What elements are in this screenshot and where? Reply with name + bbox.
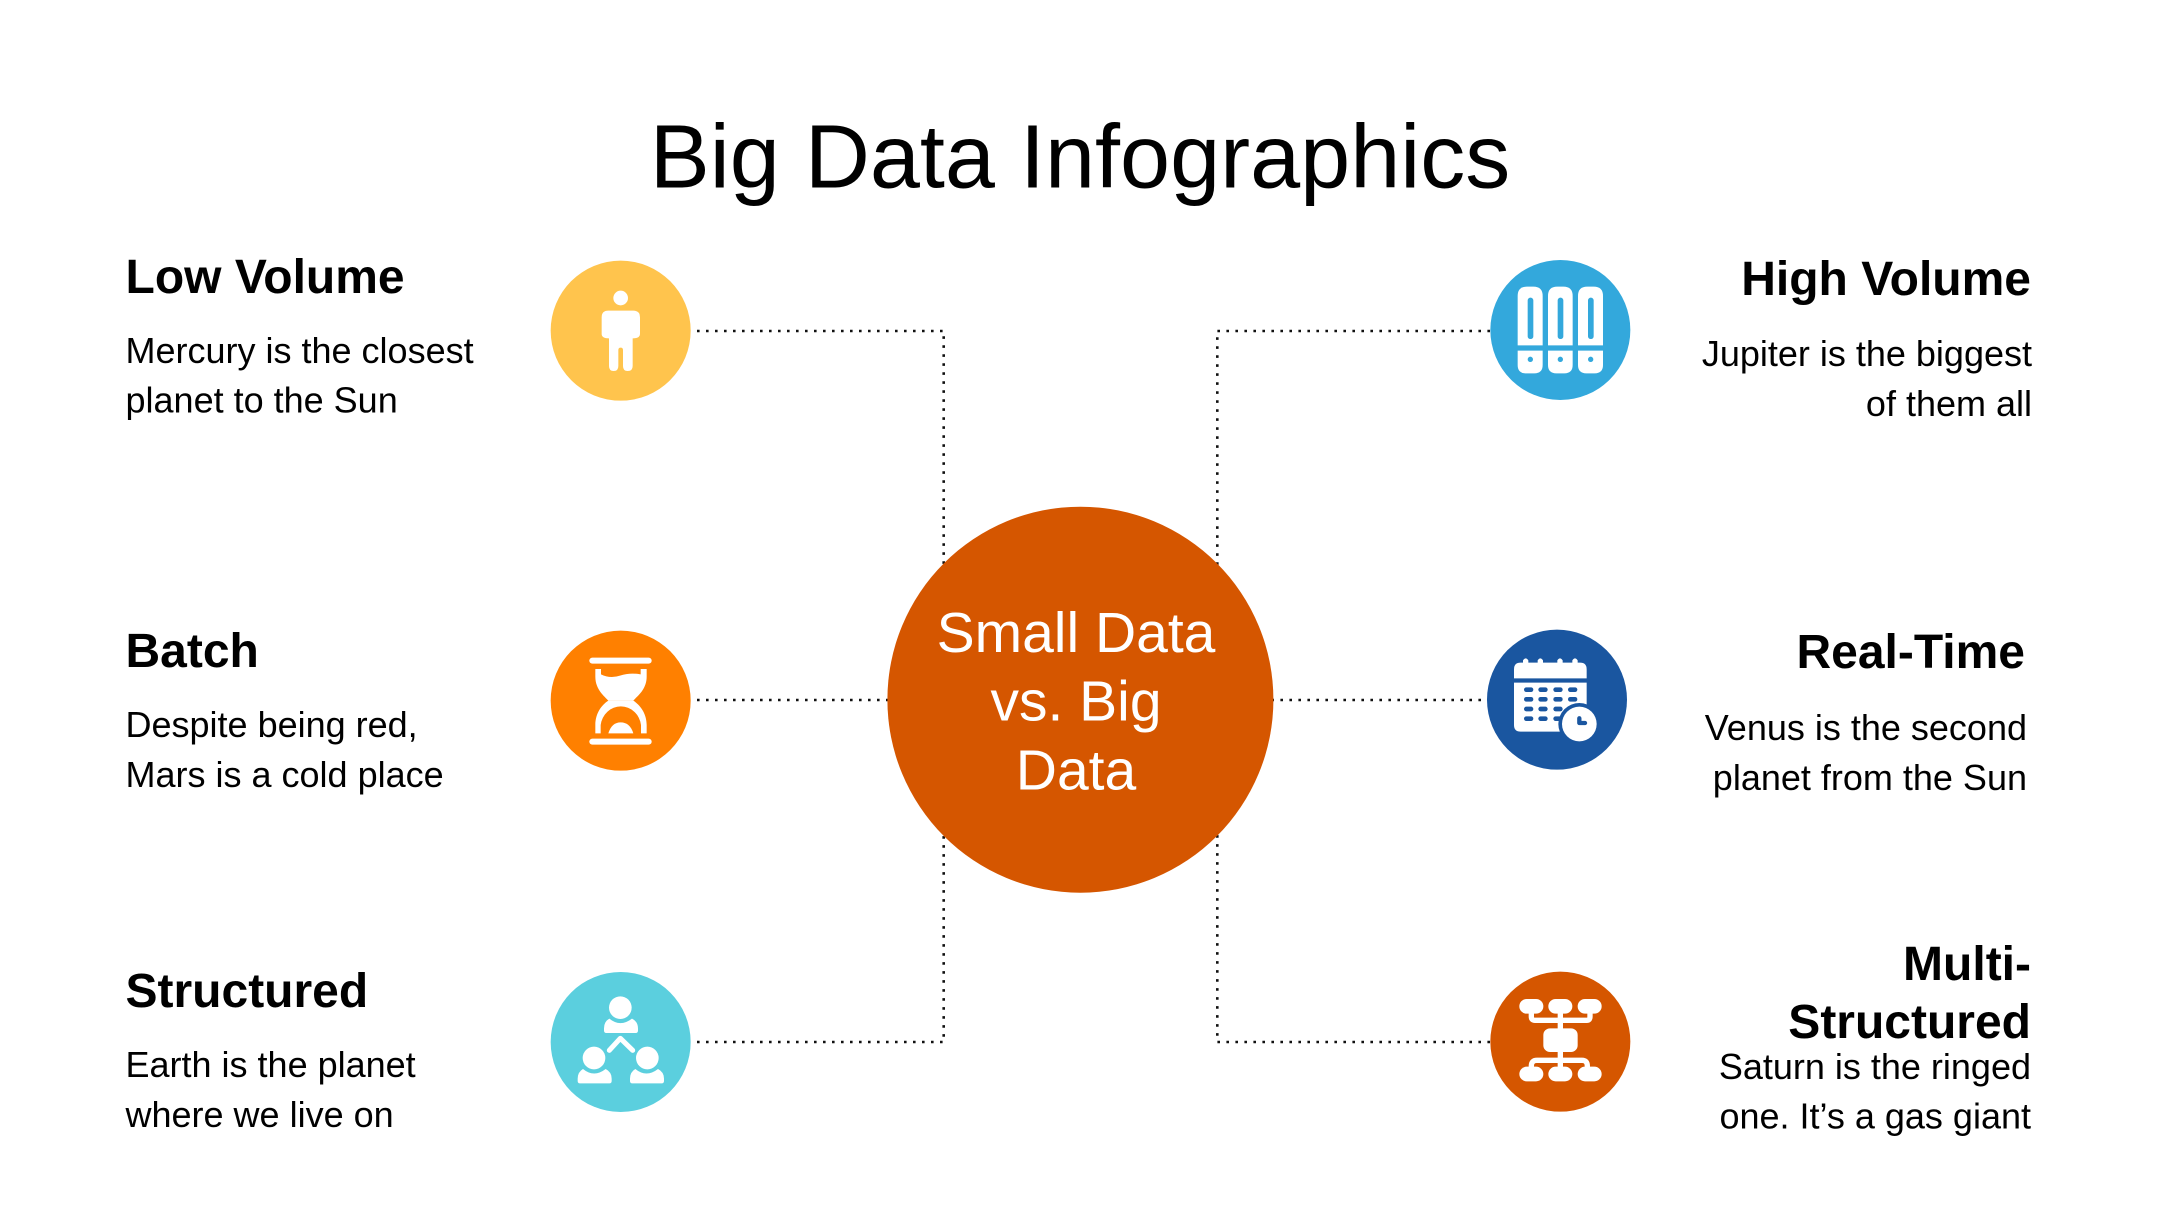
panel: high volume text: of them all <box>1866 383 2032 424</box>
panel: structured text <box>124 965 416 1135</box>
panel: high volume text: Jupiter is the biggest <box>1702 333 2032 374</box>
icon: binders on blue circle <box>1490 260 1630 400</box>
panel: batch text <box>126 625 444 795</box>
panel: real-time text: Real-Time <box>1796 626 2025 679</box>
panel: real-time text: planet from the Sun <box>1713 757 2027 798</box>
panel: multi-structured text <box>1719 938 2031 1136</box>
panel: real-time text <box>1705 626 2027 798</box>
panel: low volume text <box>126 251 474 420</box>
icon: network tree on burnt orange circle <box>1490 972 1630 1112</box>
panel: multi-structured text: Structured <box>1788 996 2031 1049</box>
panel: batch text: Despite being red, <box>126 704 418 745</box>
panel: structured text: Structured <box>126 965 368 1018</box>
title: Big Data Infographics <box>650 108 1510 208</box>
panel: structured text: Earth is the planet <box>126 1044 416 1085</box>
panel: low volume text: planet to the Sun <box>126 380 398 420</box>
panel: batch text: Batch <box>126 625 259 678</box>
central circle: small data vs big data <box>887 507 1273 893</box>
icon: team hierarchy on teal circle <box>551 972 691 1112</box>
panel: structured text: where we live on <box>124 1094 394 1135</box>
panel: high volume text <box>1702 253 2032 424</box>
central circle: small data vs big data: Data <box>1016 738 1136 802</box>
panel: multi-structured text: Saturn is the ringed <box>1719 1046 2031 1087</box>
icon: calendar with clock on navy circle <box>1487 630 1627 770</box>
panel: multi-structured text: one. It’s a gas giant <box>1719 1096 2031 1136</box>
panel: low volume text: Low Volume <box>126 251 405 304</box>
panel: high volume text: High Volume <box>1741 253 2031 306</box>
icon: person on yellow circle <box>551 261 691 401</box>
icon: hourglass on orange circle <box>551 631 691 771</box>
connector lines <box>697 331 1490 1042</box>
panel: low volume text: Mercury is the closest <box>126 330 474 371</box>
panel: multi-structured text: Multi- <box>1903 938 2031 991</box>
central circle: small data vs big data: vs. Big <box>990 670 1162 734</box>
central circle: small data vs big data: Small Data <box>937 601 1216 665</box>
panel: real-time text: Venus is the second <box>1705 707 2027 748</box>
panel: batch text: Mars is a cold place <box>126 754 444 795</box>
